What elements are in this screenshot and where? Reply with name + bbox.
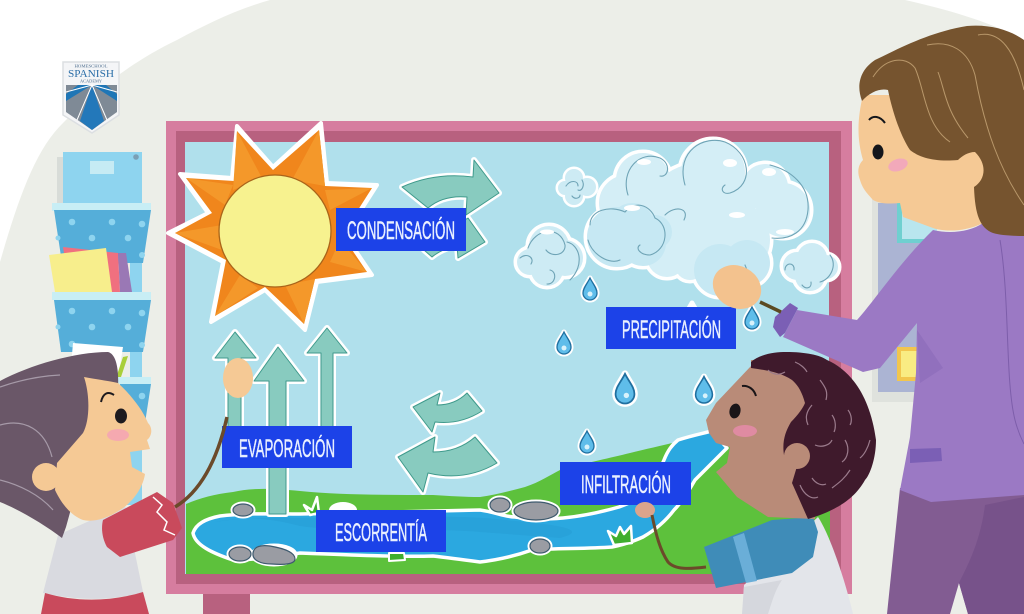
teacher torso and arm: [773, 223, 1024, 502]
label: CONDENSACIÓN: [336, 208, 466, 251]
label: INFILTRACIÓN: [560, 462, 691, 505]
teacher pants: [887, 488, 1024, 614]
arrow: evaporation left: [215, 332, 256, 430]
teacher hair: [859, 26, 1024, 236]
teacher on right: [705, 26, 1024, 614]
girl head: [32, 377, 151, 521]
label: EVAPORACIÓN: [222, 426, 352, 468]
arrows: evaporation rising: [215, 328, 347, 514]
label: EVAPORACIÓN: EVAPORACIÓN: [239, 434, 335, 463]
girl skirt: [41, 592, 149, 614]
girl sleeve: [102, 492, 182, 557]
label: PRECIPITACIÓN: PRECIPITACIÓN: [622, 315, 721, 344]
logo: Homeschool Spanish Academy shield: HOMESCHOOL: [74, 64, 108, 68]
drop: [745, 307, 759, 329]
curved arrows above river: [398, 393, 497, 492]
girl on left with pointer: [0, 352, 253, 614]
drop: [580, 431, 594, 453]
cloud: right: [783, 243, 838, 291]
curved arrows near condensation: [402, 160, 499, 258]
sun: [168, 123, 377, 330]
river: [193, 431, 727, 562]
wall picture behind teacher: [872, 197, 937, 402]
cloud: small top: [558, 169, 596, 205]
pointer hand and stick: [175, 358, 253, 507]
boy head: [706, 352, 876, 519]
board stand: [203, 590, 250, 614]
girl hair: [0, 352, 118, 538]
label: INFILTRACIÓN: INFILTRACIÓN: [581, 470, 671, 499]
teacher face: [858, 95, 996, 231]
clouds: [517, 140, 838, 297]
boy on right with pointer: [635, 352, 876, 614]
logo: Homeschool Spanish Academy shield: [63, 62, 119, 133]
girl shirt: [43, 505, 143, 599]
wall organizer with folders and pockets: [49, 152, 151, 505]
cloud: main: [587, 140, 810, 297]
pointer hand and stick: [635, 502, 706, 568]
drop: [557, 332, 571, 354]
rocks and white stone: [229, 498, 558, 564]
ground: green land: [186, 420, 830, 574]
drop: [616, 374, 634, 404]
drop: [696, 377, 712, 403]
grass tufts: [304, 497, 632, 561]
teacher pointer hand and stick: [705, 257, 781, 317]
rain drops: [557, 278, 759, 453]
drop: [583, 278, 597, 300]
label: ESCORRENTÍA: [316, 510, 446, 552]
arrow: evaporation right: [307, 328, 347, 430]
logo: Homeschool Spanish Academy shield: SPANISH: [68, 69, 114, 80]
label: ESCORRENTÍA: ESCORRENTÍA: [335, 518, 427, 547]
board frame: [166, 121, 852, 594]
boy sleeve: [704, 517, 818, 588]
logo: Homeschool Spanish Academy shield: ACADEMY: [80, 80, 102, 84]
label: PRECIPITACIÓN: [606, 307, 736, 349]
cloud: left: [517, 226, 583, 286]
boy shirt: [742, 517, 853, 614]
drop: partly hidden: [685, 303, 699, 325]
arrow: evaporation centre: [254, 347, 304, 514]
label: CONDENSACIÓN: CONDENSACIÓN: [347, 216, 455, 245]
